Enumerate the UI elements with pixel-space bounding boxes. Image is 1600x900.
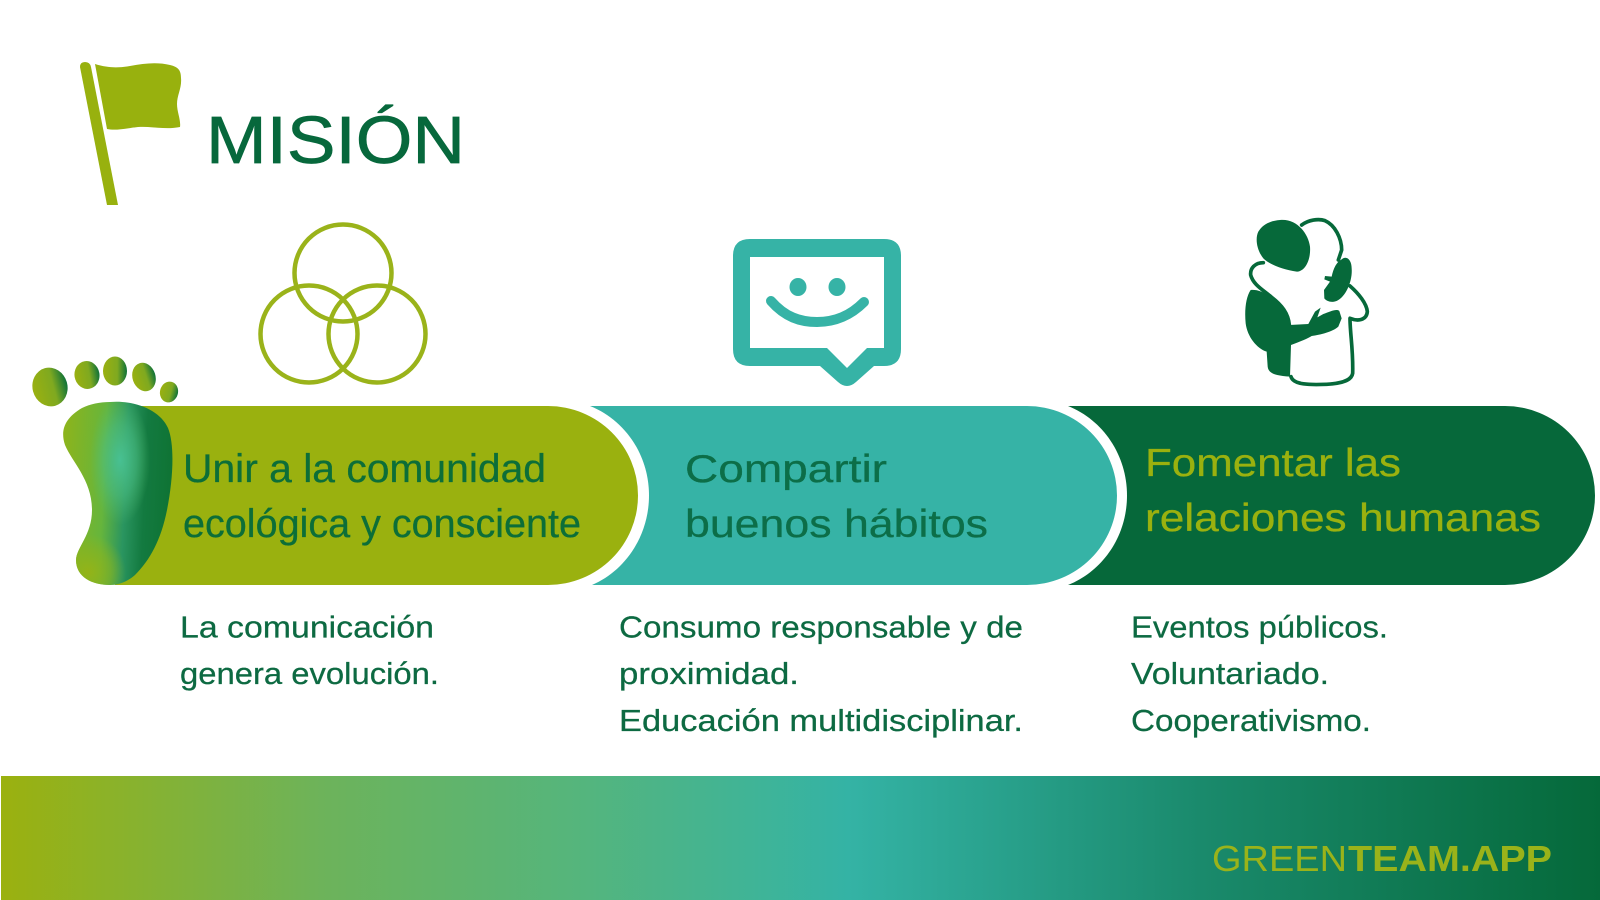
brand name: GREEN bbox=[1212, 838, 1347, 879]
text block: relaciones: Eventos públicos. bbox=[1131, 610, 1388, 644]
band: olive step bbox=[115, 406, 649, 585]
title: MISIÓN bbox=[206, 103, 465, 178]
step heading: comunidad: Unir a la comunidad bbox=[183, 447, 546, 491]
text block: hábitos: Educación multidisciplinar. bbox=[619, 703, 1023, 738]
text block: relaciones: Voluntariado. bbox=[1131, 656, 1329, 691]
step heading: comunidad: ecológica y consciente bbox=[183, 502, 581, 546]
text block: comunicación: genera evolución. bbox=[180, 656, 439, 691]
text block: hábitos: proximidad. bbox=[619, 656, 799, 691]
text block: comunicación bbox=[180, 610, 439, 691]
text block: comunicación: La comunicación bbox=[180, 610, 434, 644]
band: teal step bbox=[560, 406, 1127, 585]
text block: hábitos: Consumo responsable y de bbox=[619, 610, 1023, 644]
icon: two people hugging bbox=[1245, 220, 1367, 385]
step heading: buenos hábitos bbox=[685, 448, 988, 546]
brand name: TEAM.APP bbox=[1348, 838, 1552, 879]
step heading: relaciones humanas bbox=[1145, 442, 1541, 540]
text block: relaciones: Cooperativismo. bbox=[1131, 703, 1371, 738]
text block: hábitos bbox=[619, 610, 1023, 738]
step heading: relaciones humanas: relaciones humanas bbox=[1145, 497, 1541, 540]
text block: relaciones bbox=[1131, 610, 1388, 738]
step heading: relaciones humanas: Fomentar las bbox=[1145, 442, 1401, 485]
band: dark green step bbox=[1000, 406, 1595, 585]
footer gradient bar bbox=[1, 776, 1600, 900]
icon: flag bbox=[80, 62, 181, 205]
icon: three overlapping circles bbox=[260, 224, 426, 382]
icon: footprint bbox=[28, 356, 180, 585]
icon: chat bubble smile bbox=[733, 239, 901, 386]
step heading: comunidad bbox=[183, 447, 581, 546]
step heading: buenos hábitos: Compartir bbox=[685, 448, 887, 491]
step heading: buenos hábitos: buenos hábitos bbox=[685, 503, 988, 546]
